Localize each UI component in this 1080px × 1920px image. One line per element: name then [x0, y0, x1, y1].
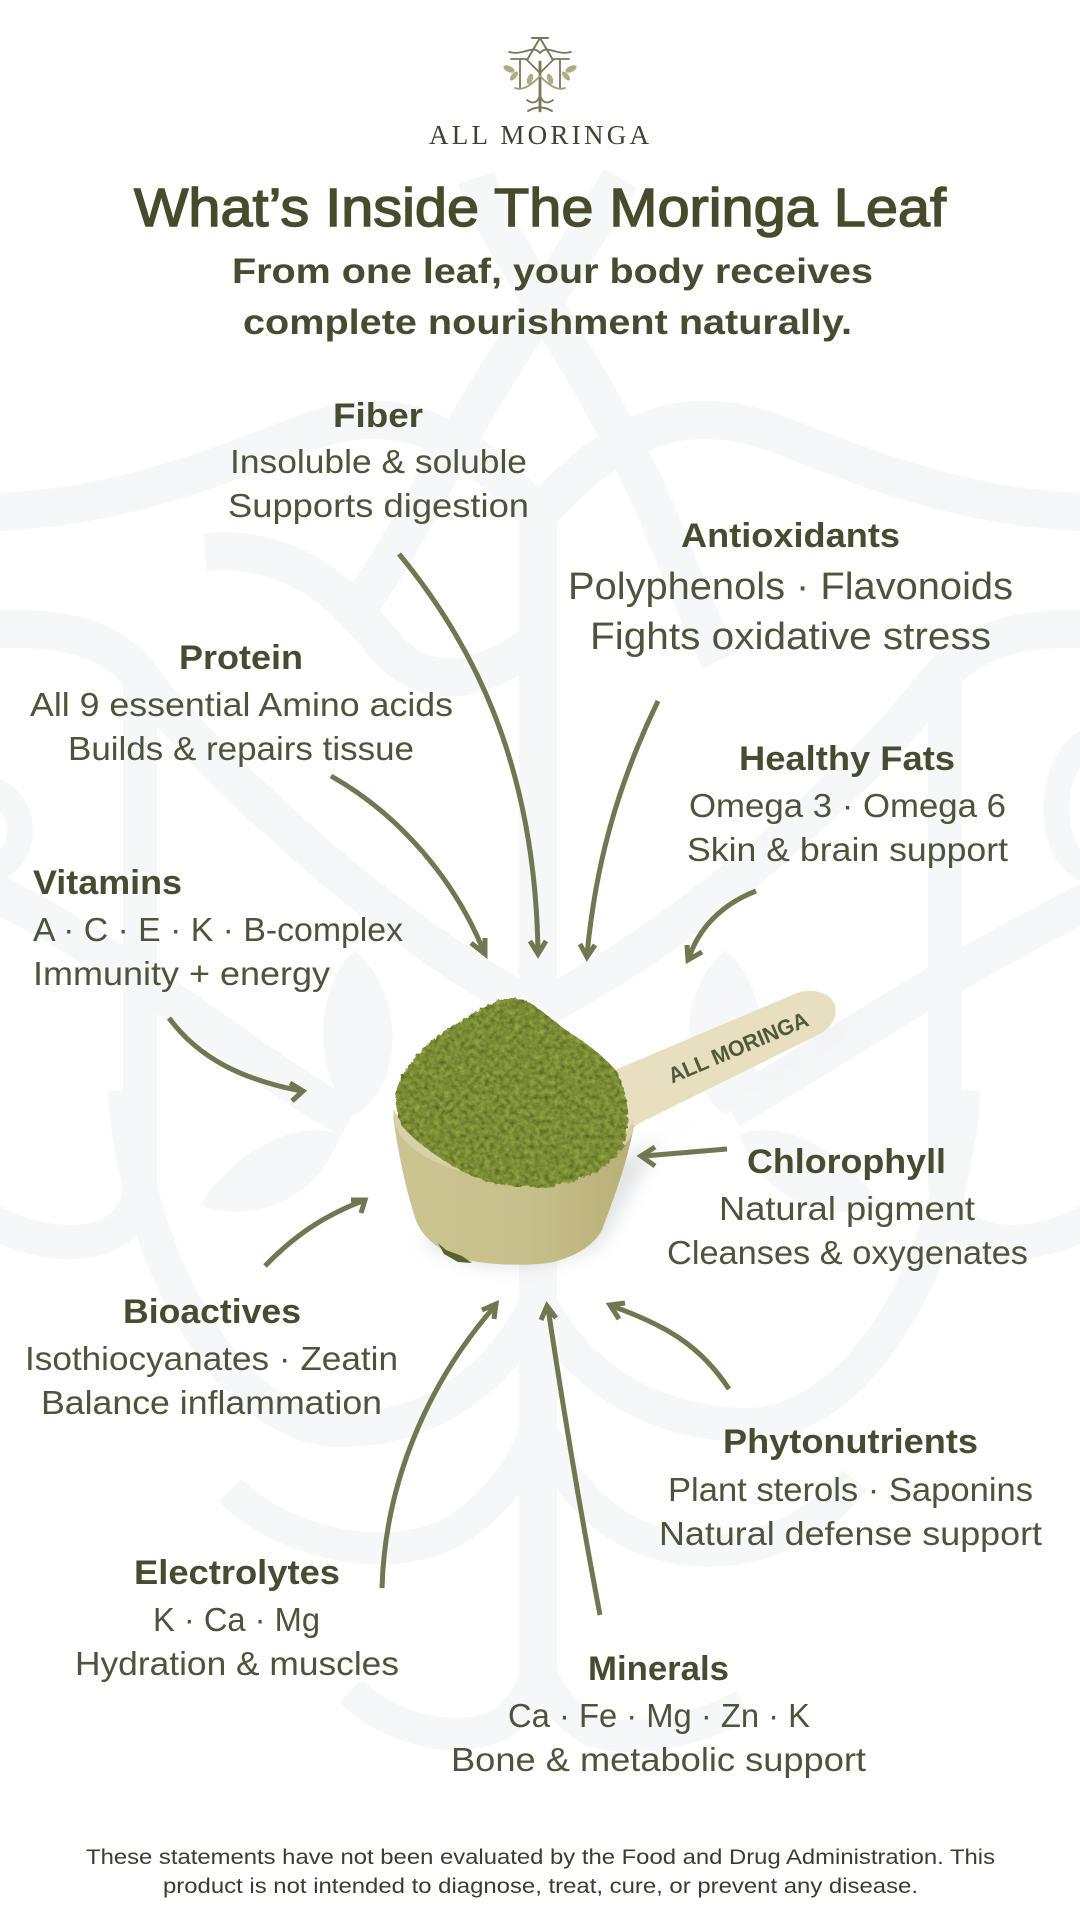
nutrient: Phytonutrients: Natural defense support — [659, 1515, 1042, 1552]
nutrient: Bioactives — [25, 1293, 398, 1421]
nutrient: Protein: Protein — [179, 639, 303, 677]
icon: moringa tree emblem — [502, 38, 578, 111]
arrow: Healthy Fats to scoop — [687, 891, 756, 960]
disclaimer: These statements have not been evaluated by the Food and Drug Administration. This — [86, 1846, 995, 1869]
nutrient: Vitamins — [33, 864, 404, 992]
arrow: Protein to scoop — [331, 776, 485, 954]
nutrient: Chlorophyll: Chlorophyll — [747, 1143, 946, 1181]
scoop with moringa powder — [393, 991, 860, 1266]
scoop rim — [393, 1108, 634, 1179]
nutrient: Vitamins: A · C · E · K · B-complex — [33, 911, 404, 948]
nutrient: Antioxidants: Antioxidants — [681, 517, 900, 555]
nutrient: Electrolytes: Hydration & muscles — [75, 1645, 399, 1682]
arrow: Phytonutrients to scoop — [610, 1303, 729, 1389]
nutrient: Bioactives: Bioactives — [123, 1293, 301, 1331]
disclaimer: product is not intended to diagnose, treat, cure, or prevent any disease. — [163, 1875, 918, 1898]
arrow: Antioxidants to scoop — [580, 701, 658, 957]
arrow: Chlorophyll to scoop — [641, 1147, 727, 1166]
nutrient: Healthy Fats: Skin & brain support — [687, 831, 1008, 868]
nutrient: Fiber: Fiber — [333, 397, 423, 435]
moringa powder pile — [395, 998, 628, 1187]
nutrient: Electrolytes — [75, 1554, 399, 1682]
wordmark: ALL MORINGA — [429, 120, 650, 150]
title: What’s Inside The Moringa Leaf — [134, 178, 947, 238]
nutrient: Electrolytes: Electrolytes — [134, 1554, 340, 1592]
subtitle: complete nourishment naturally. — [243, 303, 852, 342]
nutrient: Phytonutrients: Phytonutrients — [723, 1423, 978, 1461]
nutrient: Protein — [30, 639, 453, 767]
disclaimer — [86, 1846, 995, 1898]
handle text: ALL MORINGA — [664, 1007, 812, 1088]
nutrient: Fiber — [228, 397, 529, 524]
scoop shadow — [420, 1010, 860, 1266]
nutrient: Phytonutrients: Plant sterols · Saponins — [668, 1471, 1033, 1508]
scoop handle — [610, 991, 836, 1135]
nutrient: Antioxidants — [568, 517, 1013, 658]
nutrient: Minerals: Ca · Fe · Mg · Zn · K — [508, 1697, 810, 1734]
nutrient: Bioactives: Balance inflammation — [41, 1384, 382, 1421]
nutrient: Chlorophyll: Natural pigment — [719, 1190, 975, 1227]
nutrient: Fiber: Supports digestion — [228, 487, 529, 524]
nutrient: Electrolytes: K · Ca · Mg — [153, 1601, 320, 1638]
nutrient: Minerals: Minerals — [588, 1650, 729, 1688]
nutrient: Minerals — [451, 1650, 866, 1778]
nutrient: Protein: Builds & repairs tissue — [68, 730, 414, 767]
arrow: Fiber to scoop — [399, 554, 546, 954]
scoop cup — [393, 1115, 634, 1265]
spilled powder specks — [438, 1243, 472, 1263]
nutrient: Minerals: Bone & metabolic support — [451, 1741, 866, 1778]
nutrient: Protein: All 9 essential Amino acids — [30, 686, 453, 723]
nutrient: Antioxidants: Fights oxidative stress — [590, 616, 991, 658]
nutrient: Bioactives: Isothiocyanates · Zeatin — [25, 1340, 398, 1377]
nutrient: Phytonutrients — [659, 1423, 1042, 1552]
logo: All Moringa emblem and wordmark — [429, 38, 650, 150]
nutrient: Healthy Fats: Healthy Fats — [739, 740, 955, 778]
arrow: Vitamins to scoop — [169, 1018, 303, 1101]
nutrient: Vitamins: Vitamins — [33, 864, 182, 902]
subtitle: From one leaf, your body receives — [232, 252, 873, 291]
nutrient: Antioxidants: Polyphenols · Flavonoids — [568, 566, 1013, 608]
arrow: Electrolytes to scoop — [382, 1304, 496, 1588]
nutrient: Chlorophyll: Cleanses & oxygenates — [667, 1234, 1028, 1271]
arrow: Minerals to scoop — [541, 1306, 600, 1615]
nutrient: Fiber: Insoluble & soluble — [230, 443, 527, 480]
nutrient: Vitamins: Immunity + energy — [33, 955, 331, 992]
nutrient: Healthy Fats — [687, 740, 1008, 868]
nutrient: Chlorophyll — [667, 1143, 1028, 1271]
arrow: Bioactives to scoop — [265, 1200, 365, 1266]
subtitle — [232, 252, 873, 342]
nutrient: Healthy Fats: Omega 3 · Omega 6 — [689, 787, 1006, 824]
